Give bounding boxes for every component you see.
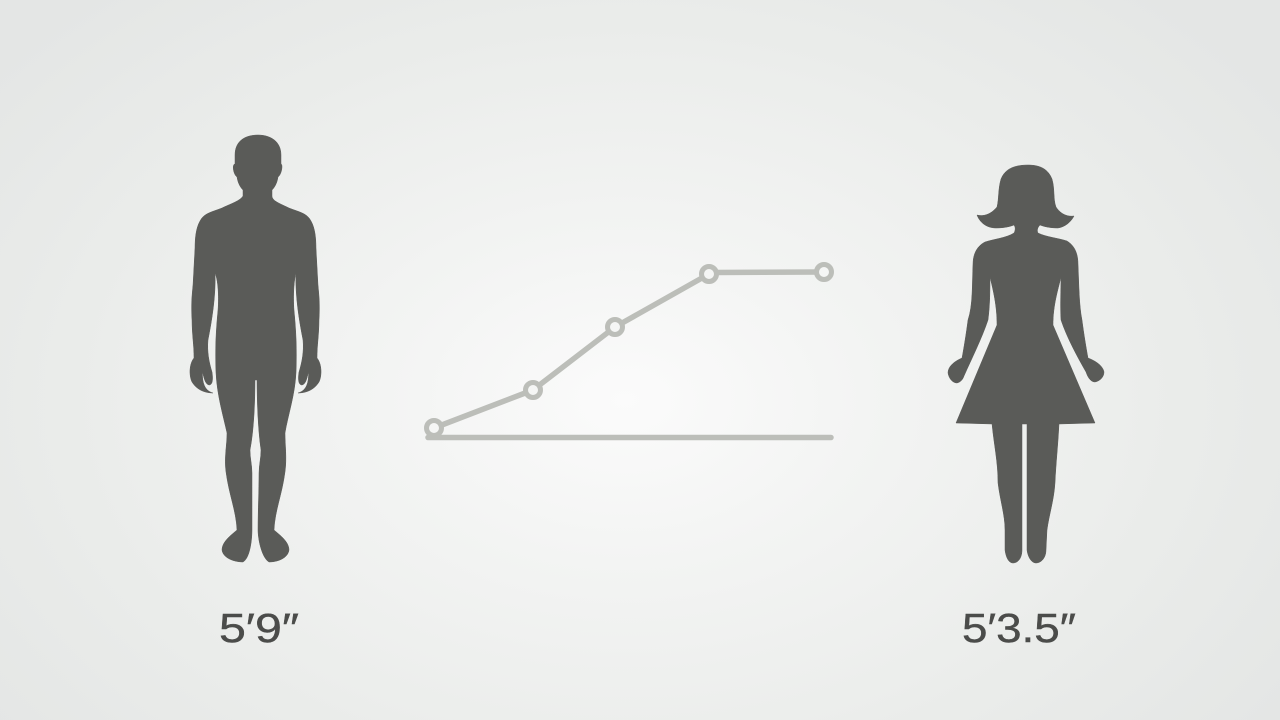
label: female height: 5′3.5″	[962, 605, 1076, 651]
icon: female silhouette	[948, 165, 1104, 563]
chart line	[434, 272, 823, 428]
label: male height: 5′9″	[219, 605, 299, 651]
chart markers	[426, 264, 832, 436]
chart baseline	[428, 435, 831, 440]
icon: male silhouette	[190, 135, 321, 562]
line chart	[426, 264, 832, 438]
